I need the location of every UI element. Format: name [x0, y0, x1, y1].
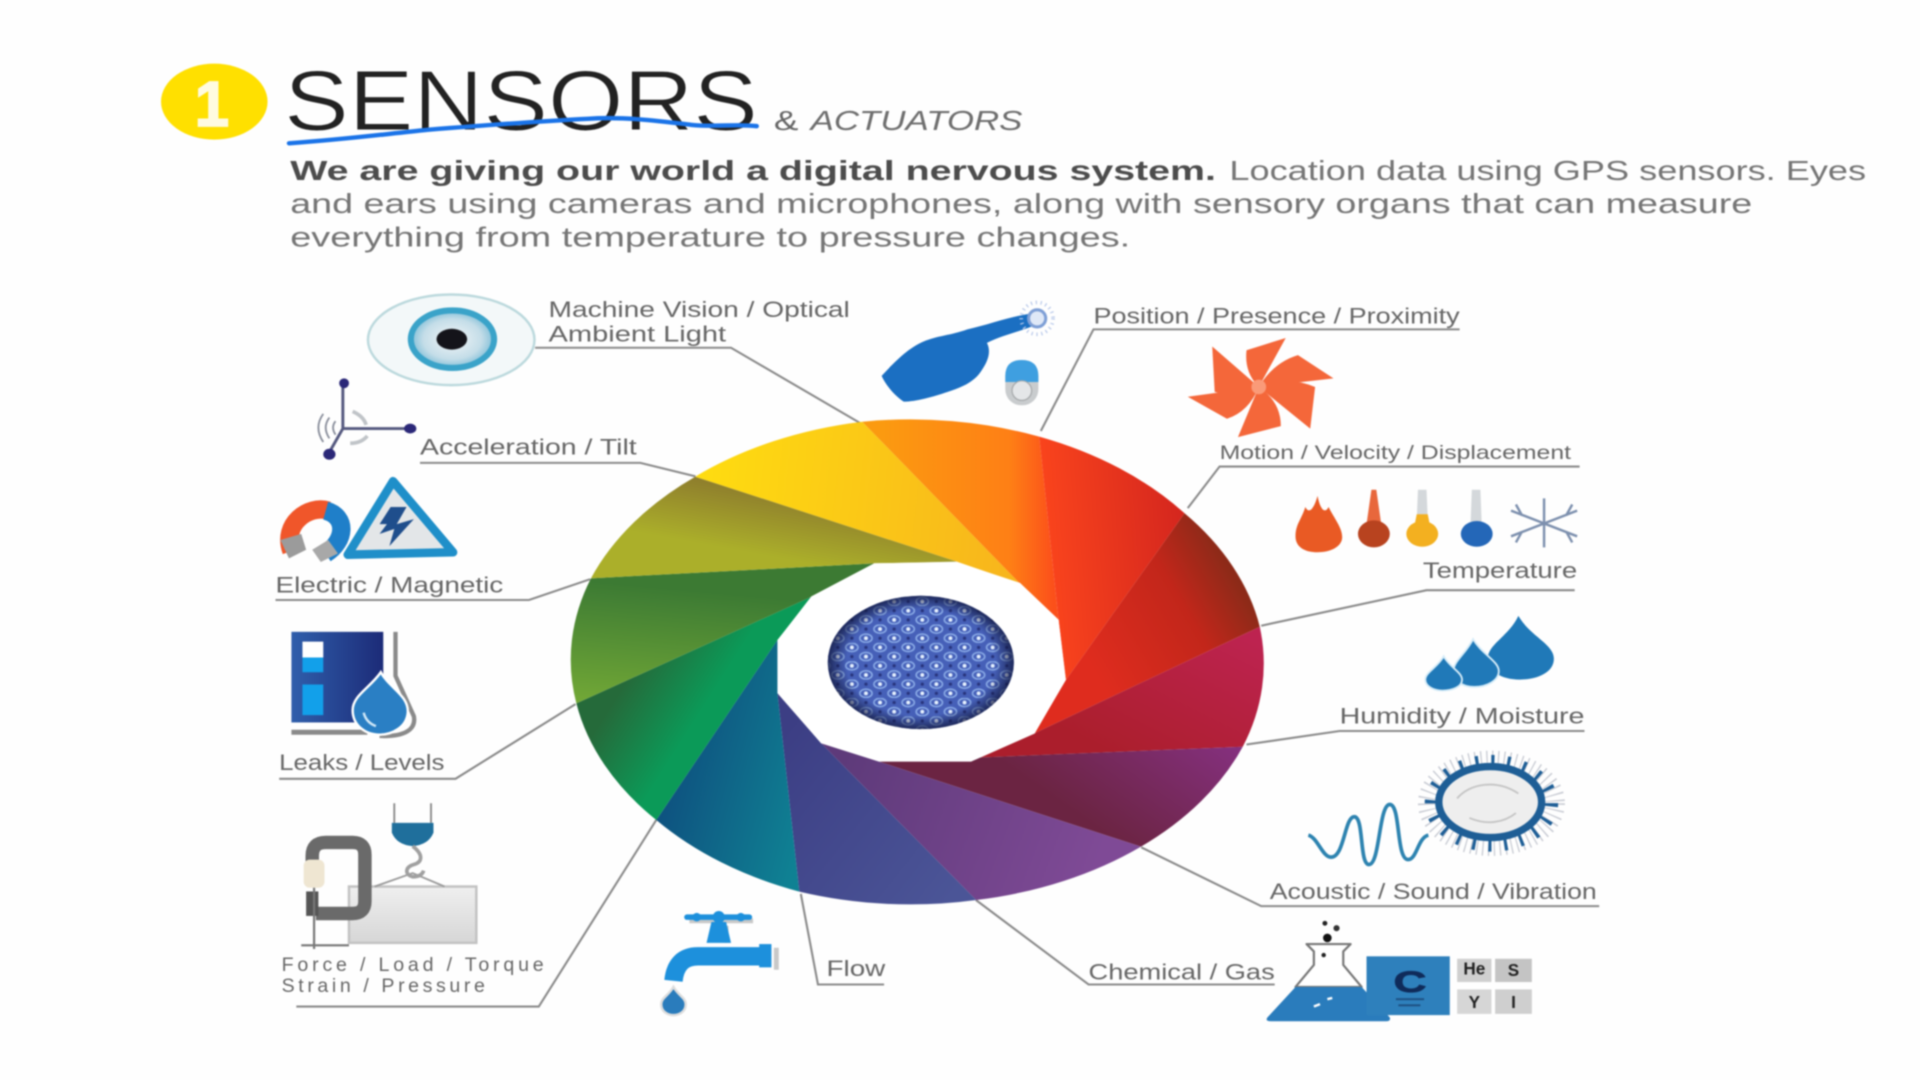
- icon: tank and flask: [291, 632, 414, 736]
- label: machine vision: Machine Vision / Optical: [549, 297, 850, 322]
- blade: orange: [862, 419, 1059, 620]
- blade: teal: [656, 640, 799, 892]
- icon: sound wave and burst: [1308, 763, 1553, 864]
- label: force: [282, 954, 544, 997]
- label: electric: Electric / Magnetic: [276, 573, 503, 598]
- icon: temperature row: [1296, 490, 1577, 552]
- leader line: acceleration: [420, 463, 696, 476]
- icon: fan: [1188, 338, 1333, 437]
- blade: dark red: [1034, 513, 1260, 733]
- icon: eye: [368, 294, 534, 385]
- subtitle: & actuators: [774, 105, 1023, 136]
- hot thermometer: [1358, 490, 1390, 547]
- label: acceleration: Acceleration / Tilt: [420, 434, 637, 459]
- hand-drawn blue underline: [289, 118, 757, 143]
- small element tiles: [1457, 959, 1532, 1014]
- flame: [1296, 496, 1342, 552]
- leader line: machine vision: [535, 348, 863, 425]
- label: chemical: Chemical / Gas: [1089, 960, 1275, 985]
- badge: number 1: 1: [195, 69, 229, 140]
- carbon tile: C: [1393, 966, 1427, 999]
- label: leaks: Leaks / Levels: [279, 750, 444, 775]
- label: humidity: Humidity / Moisture: [1340, 704, 1584, 729]
- sensor mesh ball: [828, 596, 1014, 729]
- icon: pointing hand and switch: [882, 302, 1053, 405]
- leader line: flow: [801, 894, 884, 984]
- blade: purple: [821, 743, 1141, 900]
- snowflake: [1511, 498, 1577, 547]
- blade: indigo: [777, 693, 976, 904]
- label: motion: Motion / Velocity / Displacement: [1220, 442, 1572, 464]
- wheel centre opening: [778, 562, 1066, 762]
- icon: flask and periodic tiles: [1267, 921, 1532, 1021]
- warm thermometer: [1406, 490, 1438, 547]
- icon: magnet and electric warning: [280, 481, 453, 562]
- blade: light green: [571, 563, 874, 703]
- intro paragraph: We are giving our world a digital nervous system.: [290, 155, 1216, 186]
- cold thermometer: [1461, 490, 1493, 547]
- small element tiles: Y: [1469, 992, 1481, 1012]
- label: position: Position / Presence / Proximity: [1093, 303, 1460, 328]
- label: flow: Flow: [827, 956, 885, 981]
- flask: [1267, 921, 1390, 1021]
- small element tiles: S: [1508, 960, 1519, 980]
- label: force: Strain / Pressure: [282, 975, 485, 997]
- blade: plum: [879, 747, 1243, 847]
- label: temperature: Temperature: [1423, 558, 1577, 583]
- intro paragraph: and ears using cameras and microphones, along with sensory organs that can measure: [290, 188, 1752, 219]
- blade: green: [576, 597, 811, 820]
- intro paragraph: everything from temperature to pressure changes.: [290, 222, 1130, 253]
- blade: olive: [591, 477, 957, 578]
- icon: water tap: [661, 911, 776, 1015]
- blade: crimson: [879, 627, 1264, 762]
- icon: accelerometer axes: [318, 378, 416, 460]
- badge: number 1: [161, 64, 268, 140]
- small element tiles: He: [1463, 959, 1485, 979]
- leader line: temperature: [1261, 590, 1575, 626]
- title: SENSORS: SENSORS: [284, 53, 758, 149]
- blade: yellow: [695, 422, 1020, 583]
- leader line: electric: [276, 579, 590, 600]
- label: force: Force / Load / Torque: [282, 954, 544, 976]
- leader line: position: [1041, 329, 1460, 431]
- blade: red: [1039, 437, 1185, 680]
- colour wheel: [571, 419, 1264, 904]
- leader line: acoustic: [1141, 847, 1599, 906]
- label: machine vision: [549, 297, 850, 347]
- leader line: leaks: [279, 704, 576, 779]
- carbon tile: [1367, 956, 1450, 1015]
- label: machine vision: Ambient Light: [549, 322, 726, 347]
- subtitle: & actuators: ACTUATORS: [808, 105, 1023, 136]
- leader line: humidity: [1247, 731, 1584, 744]
- intro paragraph: [290, 155, 1866, 253]
- leader line: motion: [1188, 467, 1580, 508]
- icon: humidity drops: [1425, 616, 1554, 691]
- intro paragraph: Location data using GPS sensors. Eyes: [1229, 155, 1866, 186]
- subtitle: & actuators: &: [774, 105, 799, 136]
- label: acoustic: Acoustic / Sound / Vibration: [1270, 879, 1597, 904]
- small element tiles: I: [1511, 992, 1516, 1012]
- icon: clamp and hanging load: [301, 803, 476, 949]
- leader line: chemical: [976, 900, 1275, 984]
- leader line: force: [296, 818, 658, 1007]
